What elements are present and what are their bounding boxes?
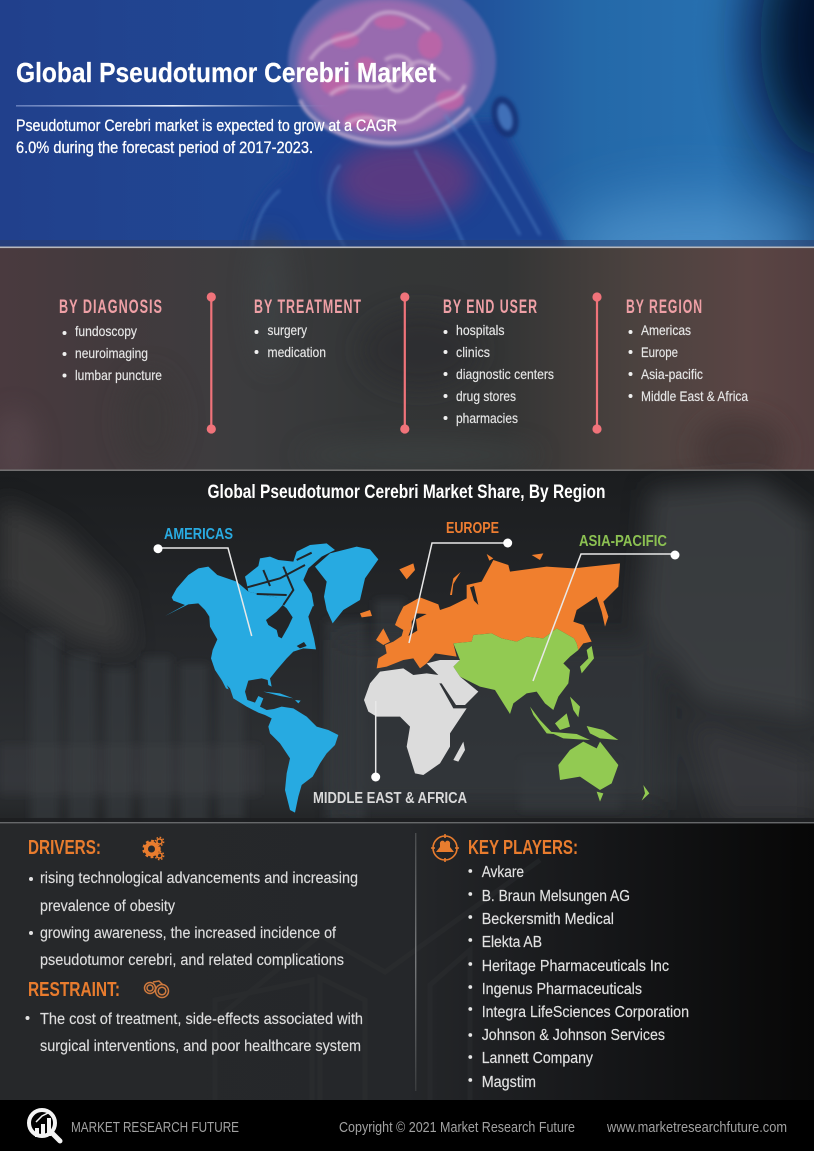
- panel: map section: [0, 471, 814, 823]
- Greenland: [315, 547, 378, 623]
- column: by region: Europe: [641, 344, 678, 360]
- column: by end user: clinics: [456, 344, 490, 360]
- divider pin 2: [400, 292, 409, 434]
- column: by region: Asia-pacific: [641, 366, 703, 382]
- column: by treatment: [254, 297, 362, 360]
- subtitle text: Pseudotumor Cerebri market is expected to grow at a CAGR: [16, 116, 397, 135]
- block: key players: Heritage Pharmaceuticals Inc: [482, 958, 669, 975]
- divider pin 1: [207, 292, 216, 434]
- block: restraint: The cost of treatment, side-effects associated with: [40, 1011, 363, 1028]
- block: drivers: rising technological advancements and increasing: [40, 870, 358, 887]
- column: by end user: pharmacies: [456, 410, 518, 426]
- divider: [415, 833, 416, 1091]
- block: key players: Avkare: [482, 864, 524, 881]
- column: by treatment: BY TREATMENT: [254, 297, 362, 318]
- column: by end user: hospitals: [456, 322, 504, 338]
- title rule: [16, 105, 330, 107]
- Australia: [558, 742, 618, 790]
- column: by diagnosis: neuroimaging: [75, 345, 148, 361]
- column: by end user: drug stores: [456, 388, 516, 404]
- footer: [0, 1100, 814, 1151]
- callout: Middle East and Africa: [313, 701, 467, 807]
- region: Middle East and Africa: [364, 660, 478, 775]
- block: key players: Johnson & Johnson Services: [482, 1027, 665, 1044]
- block: drivers: prevalence of obesity: [40, 898, 175, 915]
- callout: Europe: [409, 520, 512, 643]
- callout: Asia-Pacific: [533, 533, 680, 681]
- footer: Copyright © 2021 Market Research Future: [339, 1119, 575, 1136]
- column: by end user: diagnostic centers: [456, 366, 554, 382]
- subtitle text: 6.0% during the forecast period of 2017-2023.: [16, 138, 313, 157]
- icon: handcuffs: [144, 981, 168, 998]
- block: key players: Beckersmith Medical: [482, 911, 614, 928]
- column: by diagnosis: fundoscopy: [75, 323, 137, 339]
- callout: Americas: AMERICAS: [164, 526, 233, 543]
- block: key players: Ingenus Pharmaceuticals: [482, 981, 642, 998]
- column: by diagnosis: [59, 297, 163, 383]
- icon: target people: [431, 834, 459, 862]
- column: by treatment: medication: [268, 344, 326, 360]
- column: by diagnosis: BY DIAGNOSIS: [59, 297, 163, 318]
- panel: segmentation: [0, 230, 814, 490]
- column: by treatment: surgery: [268, 322, 307, 338]
- block: restraint: [26, 979, 363, 1055]
- block: key players: Magstim: [482, 1074, 536, 1091]
- footer: www.marketresearchfuture.com: [606, 1119, 787, 1136]
- column: by region: BY REGION: [626, 297, 703, 318]
- block: drivers: pseudotumor cerebri, and related complications: [40, 952, 344, 969]
- icon: logo: [29, 1110, 60, 1141]
- block: drivers: DRIVERS:: [28, 837, 101, 859]
- panel: hero header: [0, 0, 814, 246]
- divider pin 3: [592, 292, 602, 434]
- block: key players: [431, 834, 689, 1091]
- callout: Middle East and Africa: MIDDLE EAST & AFRICA: [313, 790, 467, 807]
- callout: Americas: [154, 526, 252, 636]
- icon: gears: [144, 837, 164, 860]
- world map: [165, 543, 649, 813]
- callout: Asia-Pacific: ASIA-PACIFIC: [579, 533, 667, 550]
- block: restraint: RESTRAINT:: [28, 979, 120, 1001]
- column: by end user: BY END USER: [443, 297, 538, 318]
- footer: MARKET RESEARCH FUTURE: [71, 1119, 239, 1136]
- region: Asia-Pacific: [453, 628, 649, 802]
- block: key players: KEY PLAYERS:: [468, 837, 578, 859]
- column: by end user: [443, 297, 554, 426]
- block: restraint: surgical interventions, and poor healthcare system: [40, 1038, 361, 1055]
- region: Americas: [165, 543, 378, 813]
- panel: drivers, restraint and key players: [0, 824, 814, 1100]
- block: drivers: [28, 837, 358, 969]
- subtitle text: [16, 116, 397, 157]
- title: Global Pseudotumor Cerebri Market: [16, 57, 436, 88]
- region: Europe and Russia: [360, 553, 620, 668]
- block: key players: B. Braun Melsungen AG: [482, 888, 630, 905]
- column: by region: Middle East & Africa: [641, 388, 748, 404]
- block: key players: Elekta AB: [482, 934, 542, 951]
- block: key players: Integra LifeSciences Corporation: [482, 1004, 689, 1021]
- column: by region: Americas: [641, 322, 691, 338]
- callout: Europe: EUROPE: [446, 520, 499, 537]
- chart heading: Global Pseudotumor Cerebri Market Share, By Region: [208, 482, 606, 503]
- block: key players: Lannett Company: [482, 1050, 593, 1067]
- column: by diagnosis: lumbar puncture: [75, 367, 162, 383]
- column: by region: [626, 297, 748, 404]
- illustration: head and brain: [245, 0, 566, 247]
- block: drivers: growing awareness, the increased incidence of: [40, 925, 336, 942]
